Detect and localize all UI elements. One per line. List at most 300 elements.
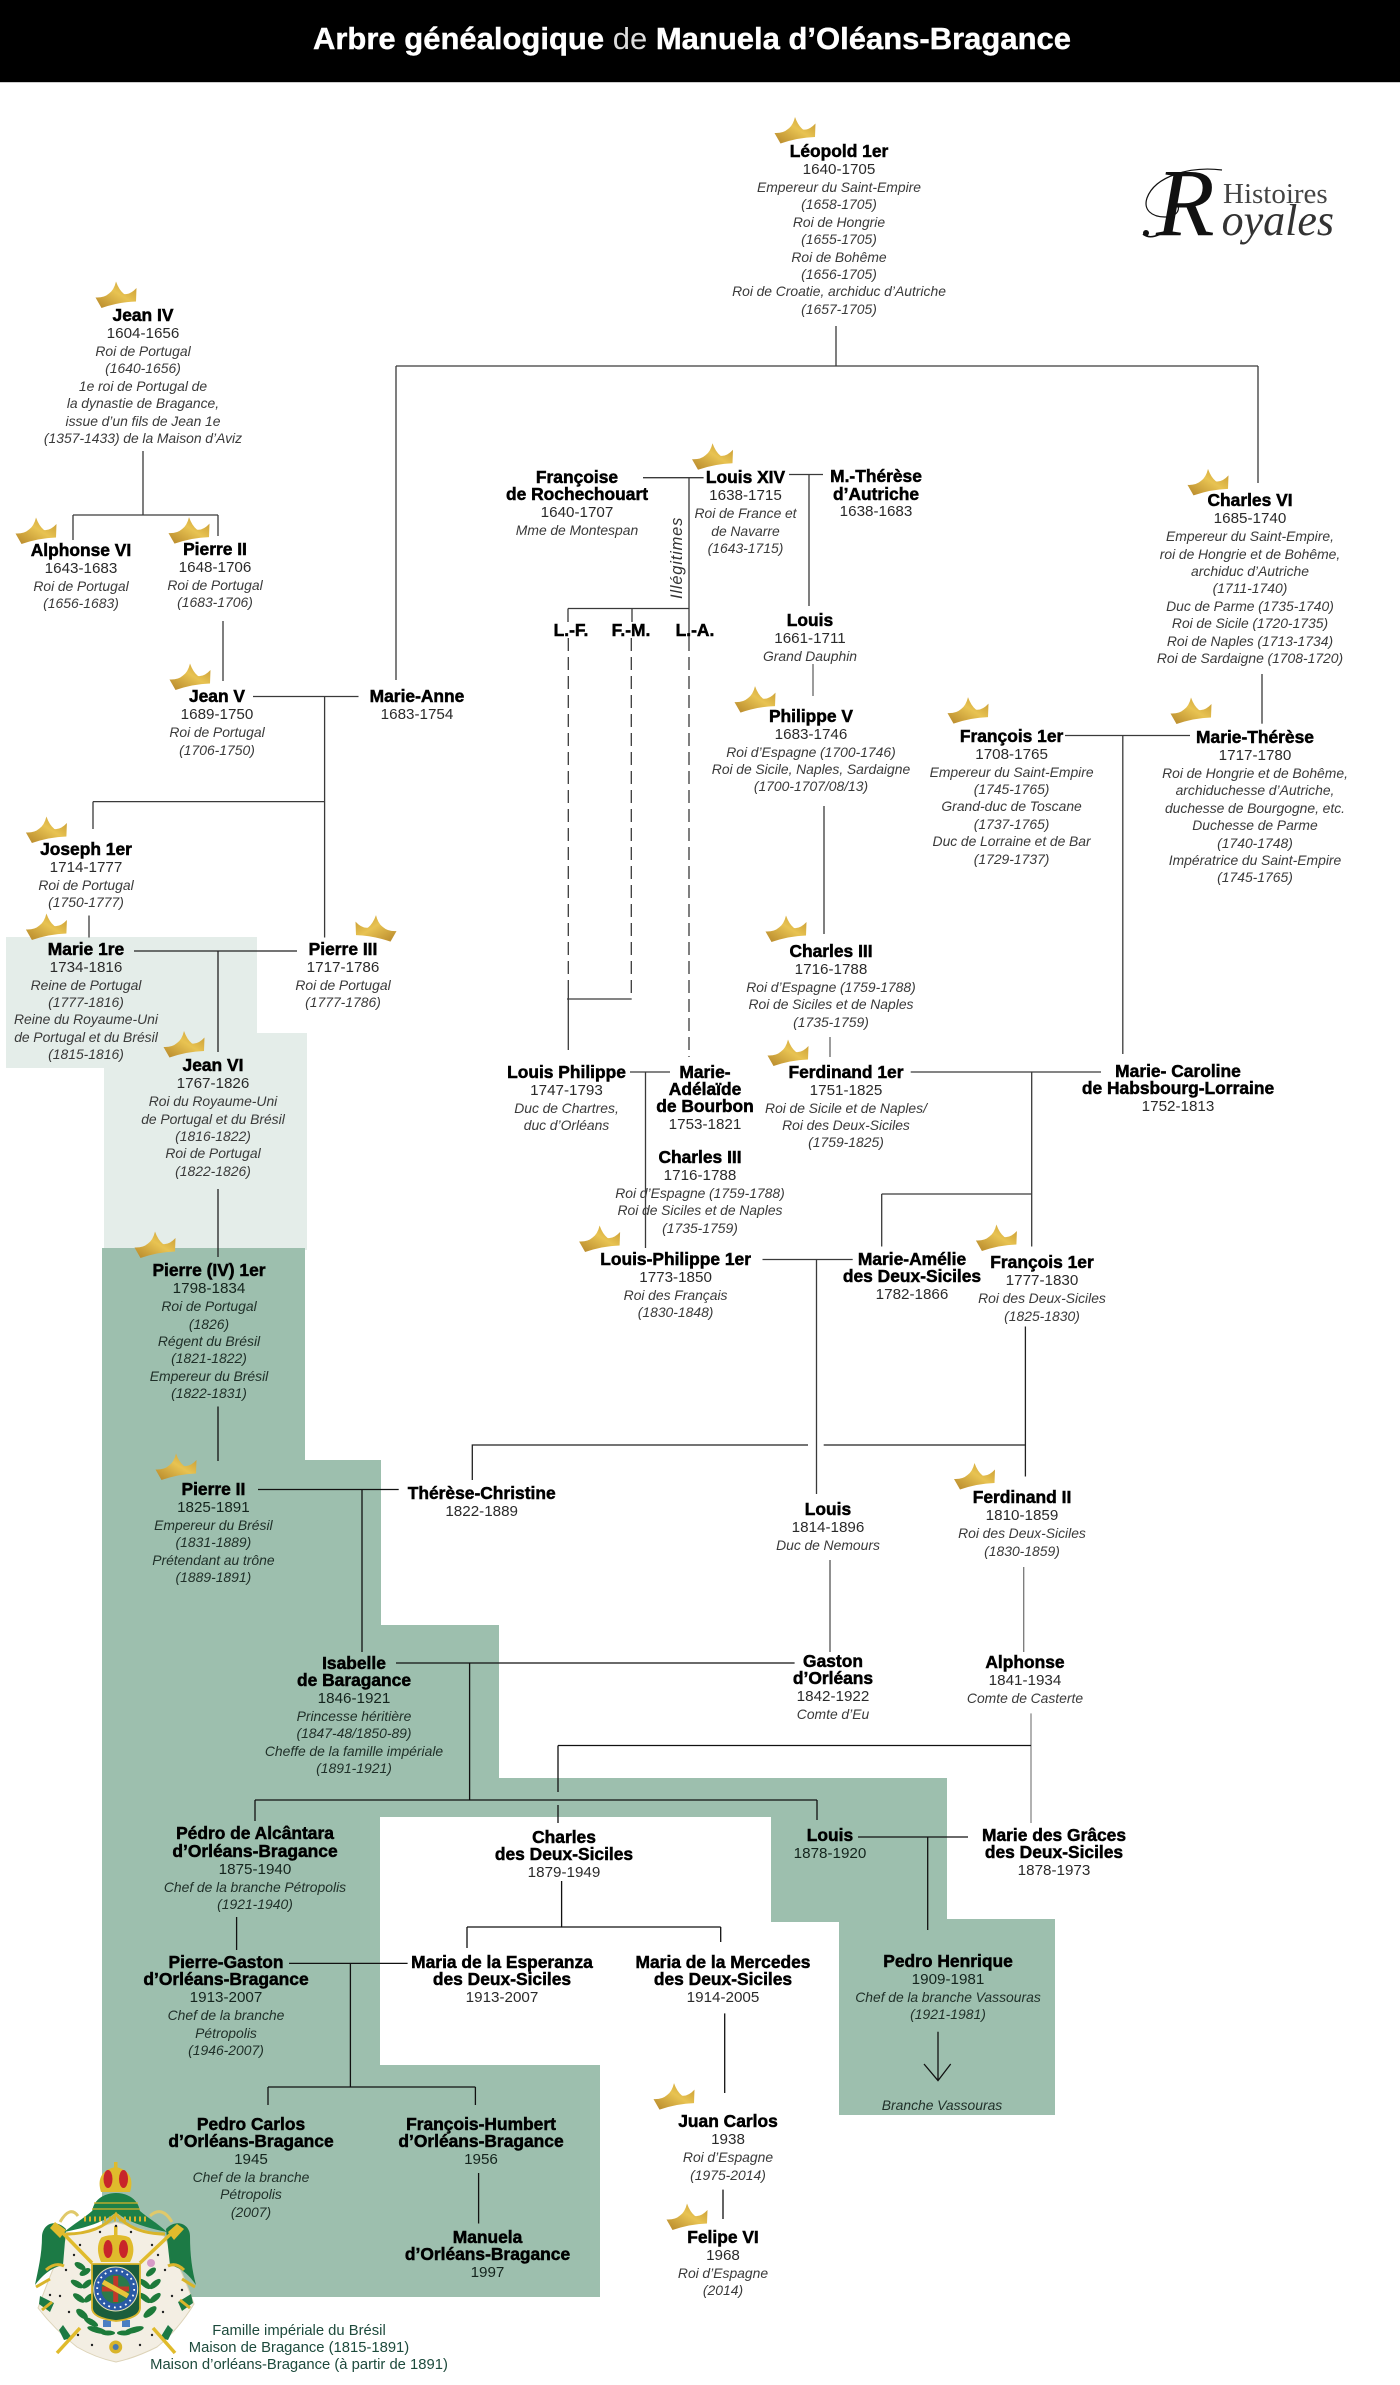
person: Alphonse VI: Roi de Portugal	[33, 578, 129, 594]
person: Louis Grand Dauphin: 1661-1711	[774, 630, 846, 646]
person: Ferdinand II: Ferdinand II	[973, 1487, 1071, 1507]
person: Marie 1re	[14, 939, 158, 1062]
icon: crown Léopold	[774, 117, 816, 144]
person: Marie-Thérèse: 1717-1780	[1219, 747, 1291, 764]
person: Pierre III: 1717-1786	[307, 958, 379, 976]
person: Pierre-Gaston: (1946-2007)	[188, 2042, 264, 2058]
person: Françoise de Rochechouart: 1640-1707	[541, 504, 613, 521]
person: Jean VI: (1822-1826)	[175, 1163, 251, 1179]
person: Jean IV: issue d’un fils de Jean 1e	[65, 413, 220, 429]
person: Joseph 1er: 1714-1777	[50, 859, 122, 876]
person: Marie-Caroline de Habsbourg-Lorraine: de Habsbourg-Lorraine	[1082, 1078, 1274, 1098]
person: Charles VI: 1685-1740	[1214, 510, 1286, 527]
person: François 1er des Deux-Siciles: Roi des Deux-Siciles	[978, 1290, 1106, 1306]
person: Pierre II du Brésil: Empereur du Brésil	[154, 1517, 273, 1533]
person: Jean V: Jean V	[189, 686, 245, 706]
person: Pedro Henrique: Chef de la branche Vassouras	[855, 1988, 1041, 2004]
person: Pedro Carlos	[168, 2116, 334, 2221]
person: Felipe VI	[678, 2229, 768, 2299]
person: Pédro de Alcântara: (1921-1940)	[217, 1896, 293, 1912]
person: Jean IV: 1604-1656	[107, 325, 179, 342]
person: Pierre II de Portugal: (1683-1706)	[177, 594, 253, 610]
connector: Louis Philippe and Marie-Adélaïde to Louis-Philippe 1er	[630, 1072, 670, 1248]
connector: Charles descendants	[467, 1881, 721, 1948]
person: Pierre-Gaston: 1913-2007	[190, 1989, 262, 2006]
person: Charles III: (1735-1759)	[793, 1014, 869, 1030]
person: Ferdinand 1er	[765, 1062, 928, 1150]
person: François 1er: (1737-1765)	[974, 816, 1049, 832]
person: Thérèse-Christine	[408, 1483, 556, 1520]
person: Charles des Deux-Siciles: Charles	[532, 1827, 596, 1847]
person: François 1er: Duc de Lorraine et de Bar	[933, 833, 1091, 849]
person: Ferdinand 1er: 1751-1825	[810, 1082, 882, 1098]
person: Léopold 1er	[732, 141, 946, 317]
person: Pierre II du Brésil: Prétendant au trône	[152, 1552, 275, 1568]
connector: Pierre-Gaston descendants	[268, 1963, 475, 2105]
person: Marie 1re: (1777-1816)	[48, 994, 124, 1010]
person: François 1er: (1745-1765)	[974, 781, 1049, 797]
legend: Famille impériale du Brésil	[149, 2323, 449, 2375]
person: Ferdinand 1er: Roi de Sicile et de Naples/	[765, 1100, 927, 1116]
person: Marie-Adélaïde de Bourbon: Adélaïde	[669, 1079, 741, 1099]
person: Gaston d'Orléans: Comte d’Eu	[797, 1706, 869, 1722]
person: Philippe V	[712, 706, 910, 794]
person: Ferdinand II: Roi des Deux-Siciles	[958, 1525, 1086, 1541]
person: Felipe VI: Felipe VI	[687, 2227, 759, 2247]
label: Branche Vassouras: Branche Vassouras	[882, 2097, 1002, 2113]
person: Pédro de Alcântara: Pédro de Alcântara	[176, 1823, 334, 1843]
person: Felipe VI: 1968	[706, 2246, 740, 2264]
person: Ferdinand II	[958, 1487, 1086, 1559]
person: Charles III: Charles III	[789, 941, 873, 961]
person: Alphonse: 1841-1934	[989, 1672, 1061, 1689]
person: Pedro Henrique: Pedro Henrique	[883, 1951, 1013, 1971]
person: Françoise de Rochechouart: Mme de Montespan	[516, 522, 638, 538]
connector: Ferdinand 1er and Marie-Caroline descendants	[882, 1072, 1101, 1246]
person: Pedro Henrique: 1909-1981	[912, 1970, 984, 1988]
person: Pierre II du Brésil: (1889-1891)	[176, 1569, 251, 1585]
person: François-Humbert	[398, 2116, 564, 2169]
icon: crown Pierre II Brésil	[156, 1454, 196, 1480]
person: Marie-Adélaïde de Bourbon: 1753-1821	[669, 1116, 741, 1133]
connector: François 1er and Marie-Thérèse to Marie-Caroline	[1065, 736, 1190, 1054]
person: Marie-Adélaïde de Bourbon: de Bourbon	[656, 1096, 754, 1116]
person: Pierre (IV) 1er: 1798-1834	[173, 1280, 245, 1297]
person: Charles III second mention: Roi d’Espagne (1759-1788)	[615, 1185, 785, 1201]
person: Jean VI: 1767-1826	[177, 1075, 249, 1092]
person: Isabelle de Baragance: (1891-1921)	[316, 1760, 392, 1776]
person: Joseph 1er: Joseph 1er	[40, 839, 132, 859]
person: Marie 1re: Reine du Royaume-Uni	[14, 1011, 158, 1027]
person: François 1er des Deux-Siciles: 1777-1830	[1006, 1272, 1078, 1289]
person: Pierre III: (1777-1786)	[305, 994, 381, 1010]
connector: Louis and Marie des Grâces to Pedro Henrique	[858, 1837, 968, 1930]
person: Maria de la Esperanza: des Deux-Siciles	[433, 1969, 571, 1989]
person: Maria de la Esperanza: 1913-2007	[466, 1989, 538, 2006]
person: Louis duc de Nemours: 1814-1896	[792, 1518, 864, 1536]
person: Charles des Deux-Siciles: des Deux-Siciles	[495, 1844, 633, 1864]
person: Alphonse	[967, 1652, 1083, 1706]
person: Joseph 1er: Roi de Portugal	[38, 877, 134, 893]
person: Ferdinand II: 1810-1859	[986, 1507, 1058, 1524]
connector: Charles III to Ferdinand 1er	[829, 1037, 831, 1057]
person: Louis Philippe	[507, 1062, 626, 1133]
person: Pierre-Gaston	[143, 1954, 309, 2059]
person: Marie-Thérèse: archiduchesse d’Autriche,	[1176, 782, 1334, 798]
connector: Léopold 1er descendants	[396, 326, 1258, 680]
person: Jean IV: (1357-1433) de la Maison d’Aviz	[44, 430, 242, 446]
person: Louis-Philippe 1er	[600, 1249, 751, 1320]
person: Léopold 1er: (1658-1705)	[801, 196, 877, 212]
icon: crown Marie-Thérèse	[1170, 698, 1212, 724]
person: Louis-Philippe 1er: Roi des Français	[624, 1286, 728, 1302]
person: François-Humbert: 1956	[464, 2151, 498, 2168]
person: Charles VI: Charles VI	[1207, 490, 1293, 510]
person: Louis XIV: Louis XIV	[706, 467, 785, 487]
person: Maria de la Esperanza: Maria de la Esperanza	[411, 1952, 593, 1972]
person: Louis XIV: de Navarre	[711, 523, 780, 539]
icon: crown Philippe V	[734, 686, 776, 713]
person: Léopold 1er: 1640-1705	[803, 161, 875, 178]
person: Pierre II de Portugal: Pierre II	[183, 539, 247, 559]
person: Pédro de Alcântara: 1875-1940	[219, 1860, 291, 1878]
person: François-Humbert: François-Humbert	[406, 2114, 556, 2134]
person: Pierre II du Brésil: (1831-1889)	[176, 1534, 251, 1550]
person: Pedro Henrique: (1921-1981)	[910, 2006, 986, 2022]
title: Arbre généalogique de Manuela d’Oléans-Bragance	[313, 21, 1071, 56]
person: Pierre (IV) 1er: (1822-1831)	[171, 1385, 247, 1401]
person: Marie 1re: de Portugal et du Brésil	[14, 1029, 158, 1045]
person: Jean V: (1706-1750)	[179, 742, 255, 758]
person: Jean VI: Roi du Royaume-Uni	[149, 1093, 277, 1109]
person: Charles des Deux-Siciles: 1879-1949	[528, 1864, 600, 1881]
connector: Pierre IV to Pierre II	[217, 1406, 219, 1461]
person: Thérèse-Christine: Thérèse-Christine	[408, 1483, 556, 1503]
person: Marie-Thérèse: (1740-1748)	[1217, 835, 1293, 851]
person: Felipe VI: Roi d’Espagne	[678, 2264, 768, 2280]
person: Marie-Amélie des Deux-Siciles: des Deux-Siciles	[843, 1266, 981, 1286]
person: Louis Philippe: duc d’Orléans	[524, 1117, 609, 1133]
person: Pierre II de Portugal	[167, 539, 263, 610]
person: Léopold 1er: Roi de Croatie, archiduc d’Autriche	[732, 283, 946, 299]
person: Marie-Amélie des Deux-Siciles: 1782-1866	[876, 1286, 948, 1303]
person: Pedro Henrique	[855, 1953, 1041, 2023]
person: F.-M.: F.-M.	[612, 620, 650, 640]
person: Thérèse-Christine: 1822-1889	[445, 1502, 518, 1520]
icon: crown Charles III	[766, 916, 806, 942]
person: Louis-Philippe 1er: Louis-Philippe 1er	[600, 1249, 751, 1269]
connector: Jean V and Marie-Anne descendants	[93, 696, 358, 938]
person: Léopold 1er: (1655-1705)	[801, 231, 877, 247]
connector: Jean IV descendants	[73, 451, 218, 540]
person: Pierre II du Brésil: 1825-1891	[177, 1499, 250, 1516]
person: Marie-Amélie des Deux-Siciles	[843, 1249, 981, 1303]
person: Pierre (IV) 1er	[150, 1260, 268, 1401]
person: Pedro Carlos: d’Orléans-Bragance	[168, 2131, 334, 2151]
connector: L.-F. and F.-M. to Louis Philippe	[567, 989, 632, 1050]
icon: crown Felipe VI	[666, 2204, 708, 2230]
person: Marie-Thérèse: Impératrice du Saint-Empire	[1169, 852, 1341, 868]
connector: Marie 1re and Pierre III to Jean VI	[134, 951, 297, 1052]
person: Louis duc de Nemours: Louis	[805, 1499, 851, 1519]
person: Pierre (IV) 1er: Empereur du Brésil	[150, 1368, 268, 1384]
person: Maria de la Mercedes: 1914-2005	[687, 1989, 759, 2006]
person: Léopold 1er: Empereur du Saint-Empire	[757, 179, 921, 195]
person: Charles VI: archiduc d’Autriche	[1191, 563, 1309, 579]
person: Louis 1878: 1878-1920	[794, 1845, 866, 1862]
person: Louis duc de Nemours: Duc de Nemours	[776, 1536, 880, 1552]
person: Louis Philippe: 1747-1793	[530, 1082, 603, 1098]
logo: Histoires Royales: Histoires	[1223, 178, 1328, 210]
person: Charles VI: (1711-1740)	[1213, 580, 1287, 596]
person: Jean IV	[44, 305, 242, 446]
person: Marie-Thérèse	[1162, 727, 1348, 885]
person: Marie-Thérèse: Marie-Thérèse	[1196, 727, 1314, 747]
person: Charles VI: Empereur du Saint-Empire,	[1166, 528, 1334, 544]
person: Louis Philippe: Duc de Chartres,	[514, 1100, 619, 1116]
person: Marie 1re: Reine de Portugal	[31, 976, 141, 992]
person: Pierre II de Portugal: 1648-1706	[179, 559, 251, 576]
person: Pierre-Gaston: Pétropolis	[195, 2025, 257, 2041]
person: Manuela: d’Orléans-Bragance	[405, 2244, 570, 2264]
person: Pierre (IV) 1er: Roi de Portugal	[161, 1298, 257, 1314]
person: Isabelle de Baragance: de Baragance	[297, 1670, 411, 1690]
person: Françoise de Rochechouart: Françoise	[536, 467, 618, 487]
person: Jean VI: de Portugal et du Brésil	[141, 1111, 285, 1127]
person: Pierre (IV) 1er: Régent du Brésil	[158, 1333, 260, 1349]
person: Léopold 1er: (1657-1705)	[801, 301, 877, 317]
arrow: branche Vassouras	[924, 2032, 951, 2081]
person: L.-F.: L.-F.	[554, 620, 588, 640]
person: Alphonse VI	[30, 540, 131, 611]
icon: crown François 1er	[948, 697, 988, 724]
person: Louis Grand Dauphin: Louis	[787, 610, 833, 630]
connector: Mercedes to Juan Carlos	[724, 2013, 726, 2093]
person: Marie des Grâces	[982, 1827, 1126, 1880]
person: Jean V: 1689-1750	[181, 706, 253, 723]
person: Louis Philippe: Louis Philippe	[507, 1062, 626, 1082]
person: Pedro Carlos: Pedro Carlos	[197, 2114, 305, 2134]
person: Jean V: Roi de Portugal	[169, 724, 265, 740]
person: Marie 1re: (1815-1816)	[48, 1046, 124, 1062]
person: Pédro de Alcântara: d’Orléans-Bragance	[172, 1841, 338, 1861]
person: François 1er: François 1er	[960, 726, 1063, 746]
person: Isabelle de Baragance: (1847-48/1850-89)	[296, 1725, 412, 1741]
person: Isabelle de Baragance: Cheffe de la famille impériale	[265, 1743, 443, 1759]
person: Pierre II de Portugal: Roi de Portugal	[167, 577, 263, 593]
person: Jean VI: (1816-1822)	[175, 1128, 251, 1144]
person: Jean IV: la dynastie de Bragance,	[67, 395, 219, 411]
person: Pierre II du Brésil	[152, 1479, 275, 1585]
connector: illegitimate L.-F. dashed	[567, 638, 569, 989]
person: Louis Grand Dauphin: Grand Dauphin	[763, 648, 857, 664]
person: Jean VI: Roi de Portugal	[165, 1145, 261, 1161]
connector: Thérèse-Christine parents	[472, 1326, 1025, 1480]
person: Alphonse: Comte de Casterte	[967, 1690, 1083, 1706]
person: Philippe V: 1683-1746	[775, 726, 847, 742]
person: Léopold 1er: Léopold 1er	[790, 141, 888, 161]
icon: crown Alphonse VI	[16, 518, 56, 544]
person: Charles VI: Roi de Sicile (1720-1735)	[1172, 615, 1328, 631]
connector: Louis-Philippe 1er to Louis	[762, 1260, 853, 1494]
person: Pierre (IV) 1er: (1821-1822)	[171, 1350, 247, 1366]
person: Charles VI	[1157, 490, 1343, 666]
person: Louis XIV: Roi de France et	[694, 505, 797, 521]
person: Pedro Carlos: 1945	[234, 2151, 268, 2168]
person: Ferdinand 1er: (1759-1825)	[808, 1134, 884, 1150]
person: Marie-Thérèse: duchesse de Bourgogne, etc.	[1165, 800, 1345, 816]
person: Pierre-Gaston: d’Orléans-Bragance	[143, 1969, 309, 1989]
person: Louis-Philippe 1er: (1830-1848)	[638, 1304, 713, 1320]
person: Louis XIV: 1638-1715	[709, 487, 782, 504]
person: Léopold 1er: (1656-1705)	[801, 266, 877, 282]
person: Louis 1878	[794, 1827, 866, 1863]
person: Gaston d'Orléans: 1842-1922	[797, 1688, 869, 1705]
person: Maria de la Esperanza	[411, 1954, 593, 2007]
connector: Louis to Philippe V	[812, 664, 814, 696]
connector: Juan Carlos to Felipe VI	[722, 2190, 724, 2219]
person: M.-Thérèse d'Autriche: d’Autriche	[833, 484, 919, 504]
person: Léopold 1er: Roi de Bohême	[791, 249, 887, 265]
person: Maria de la Mercedes: des Deux-Siciles	[654, 1969, 792, 1989]
person: Pierre III: Roi de Portugal	[295, 976, 391, 992]
connector: Jean VI to Pierre IV	[217, 1189, 219, 1257]
icon: crown Jean IV	[96, 282, 136, 308]
icon: crown Pierre II Portugal	[168, 517, 210, 544]
person: Marie-Thérèse: (1745-1765)	[1217, 869, 1293, 885]
person: Charles III second mention: 1716-1788	[664, 1167, 736, 1184]
connector: Pierre II to Jean V	[222, 621, 224, 681]
person: Isabelle de Baragance: Isabelle	[322, 1653, 386, 1673]
person: Felipe VI: (2014)	[703, 2282, 743, 2298]
person: Françoise de Rochechouart: de Rochechouart	[506, 484, 648, 504]
person: Charles des Deux-Siciles	[495, 1829, 633, 1882]
person: Ferdinand 1er: Ferdinand 1er	[788, 1062, 904, 1082]
person: Joseph 1er	[38, 839, 134, 910]
person: Maria de la Mercedes: Maria de la Mercedes	[636, 1952, 810, 1972]
person: Pedro Carlos: Pétropolis	[220, 2186, 282, 2202]
connector: illegitimate F.-M. dashed	[630, 638, 632, 997]
person: Marie des Grâces: des Deux-Siciles	[985, 1842, 1123, 1862]
person: Charles III: Roi de Siciles et de Naples	[748, 996, 914, 1012]
person: Gaston d'Orléans: d’Orléans	[793, 1668, 873, 1688]
person: Ferdinand II: (1830-1859)	[984, 1542, 1060, 1558]
person: Pierre (IV) 1er: Pierre (IV) 1er	[152, 1260, 266, 1280]
icon: crown Louis-Philippe 1er	[579, 1226, 620, 1252]
person: Juan Carlos	[678, 2113, 778, 2184]
person: Pierre (IV) 1er: (1826)	[189, 1316, 229, 1332]
connector: Charles VI to Marie-Thérèse	[1261, 674, 1263, 724]
person: Charles III second mention: Charles III	[658, 1147, 742, 1167]
connector: illegitimate L.-A. dashed	[688, 638, 690, 1057]
person: Marie-Anne	[370, 686, 464, 723]
person: François 1er	[930, 726, 1094, 867]
person: Marie-Anne: 1683-1754	[381, 706, 453, 723]
icon: crown Jean V	[170, 664, 210, 690]
connector: Alphonse descendants	[1030, 1713, 1032, 1823]
connector: Joseph to Marie 1re	[88, 916, 90, 938]
person: Jean IV: Jean IV	[113, 305, 173, 325]
person: Louis Grand Dauphin	[763, 610, 857, 664]
connector: Pédro to Pierre-Gaston	[236, 1917, 238, 1950]
connector: Louis to Gaston	[829, 1560, 831, 1652]
person: Louis 1878: Louis	[807, 1825, 853, 1845]
legend: Famille impériale du Brésil: Famille impériale du Brésil	[212, 2323, 386, 2339]
person: Marie-Thérèse: Roi de Hongrie et de Bohême,	[1162, 765, 1348, 781]
person: Pédro de Alcântara: Chef de la branche Pétropolis	[164, 1878, 346, 1894]
connector: Ferdinand II to Alphonse	[1023, 1567, 1025, 1652]
person: Charles III second mention	[615, 1147, 785, 1236]
legend: Famille impériale du Brésil: Maison de Bragance (1815-1891)	[189, 2340, 409, 2356]
person: Charles III second mention: (1735-1759)	[662, 1220, 738, 1236]
person: Charles III: Roi d’Espagne (1759-1788)	[746, 979, 916, 995]
person: Marie-Caroline de Habsbourg-Lorraine: 1752-1813	[1142, 1098, 1214, 1115]
person: Marie 1re: 1734-1816	[50, 958, 122, 976]
person: Léopold 1er: Roi de Hongrie	[793, 214, 885, 230]
connector: Françoise and Louis XIV	[568, 478, 704, 638]
person: Louis-Philippe 1er: 1773-1850	[639, 1268, 712, 1286]
person: Marie-Amélie des Deux-Siciles: Marie-Amélie	[858, 1249, 966, 1269]
icon: crown Jean VI	[164, 1031, 204, 1058]
person: Louis XIV	[694, 467, 797, 556]
person: François 1er des Deux-Siciles: François 1er	[990, 1252, 1094, 1272]
person: Marie-Adélaïde de Bourbon	[656, 1062, 754, 1133]
person: Marie-Adélaïde de Bourbon: Marie-	[679, 1062, 731, 1082]
legend: Famille impériale du Brésil: Maison d’orléans-Bragance (à partir de 1891)	[150, 2357, 448, 2373]
person: Juan Carlos: (1975-2014)	[690, 2166, 766, 2182]
person: Marie-Thérèse: Duchesse de Parme	[1192, 817, 1318, 833]
person: Philippe V: Philippe V	[769, 706, 853, 726]
person: Charles VI: roi de Hongrie et de Bohême,	[1160, 546, 1340, 562]
person: Pierre III: Pierre III	[309, 939, 377, 959]
person: Manuela	[405, 2229, 570, 2282]
person: Jean IV: (1640-1656)	[105, 360, 181, 376]
person: Juan Carlos: Roi d’Espagne	[683, 2149, 773, 2165]
person: Isabelle de Baragance: Princesse héritière	[297, 1708, 411, 1724]
person: François-Humbert: d’Orléans-Bragance	[398, 2131, 564, 2151]
person: Jean IV: 1e roi de Portugal de	[79, 378, 207, 394]
person: Pédro de Alcântara	[164, 1823, 346, 1912]
icon: crown Charles VI	[1188, 469, 1228, 495]
connector: Pierre II and Thérèse-Christine to Isabelle	[258, 1490, 399, 1652]
connector: Alphonse to Charles	[558, 1746, 1031, 1823]
person: François 1er: (1729-1737)	[974, 851, 1049, 867]
icon: crown Ferdinand II	[954, 1463, 995, 1490]
icon: crown Joseph 1er	[26, 816, 67, 843]
person: Pierre II du Brésil: Pierre II	[181, 1479, 245, 1499]
person: Marie-Caroline de Habsbourg-Lorraine	[1082, 1061, 1274, 1115]
person: Isabelle de Baragance: 1846-1921	[318, 1690, 390, 1707]
person: Alphonse VI: 1643-1683	[45, 560, 117, 577]
person: Pedro Carlos: (2007)	[231, 2204, 271, 2220]
person: Juan Carlos: Juan Carlos	[678, 2111, 778, 2131]
person: Louis duc de Nemours	[776, 1499, 880, 1552]
person: Marie des Grâces: Marie des Grâces	[982, 1825, 1126, 1845]
person: Alphonse VI: Alphonse VI	[31, 540, 131, 560]
person: L.-A.: L.-A.	[676, 620, 714, 640]
person: Marie-Caroline de Habsbourg-Lorraine: Marie- Caroline	[1115, 1061, 1241, 1081]
person: François 1er des Deux-Siciles: (1825-1830)	[1004, 1308, 1080, 1324]
person: Jean VI: Jean VI	[183, 1055, 243, 1075]
label: Illégitimes: Illégitimes	[668, 516, 686, 599]
icon: crown Juan Carlos	[654, 2083, 694, 2110]
person: Charles III	[746, 941, 916, 1030]
person: Charles III second mention: Roi de Siciles et de Naples	[617, 1202, 782, 1218]
person: Jean VI	[141, 1055, 286, 1179]
person: Charles VI: Duc de Parme (1735-1740)	[1166, 598, 1334, 614]
person: Pierre-Gaston: Pierre-Gaston	[168, 1952, 284, 1972]
person: Charles III: 1716-1788	[795, 961, 867, 978]
